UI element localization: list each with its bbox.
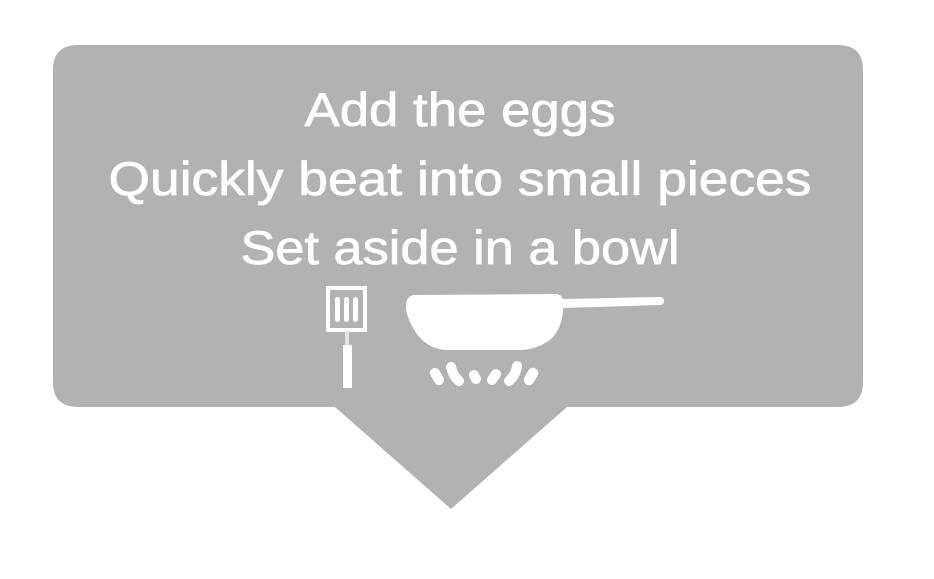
icon: frying pan [406, 294, 664, 350]
heading: add the eggs: Add the eggs [304, 83, 616, 136]
text: quickly beat into small pieces: Quickly beat into small pieces [108, 152, 812, 205]
icon: spatula [328, 288, 365, 388]
callout bubble [53, 45, 863, 509]
text: set aside in a bowl: Set aside in a bowl [240, 221, 680, 274]
icon: burner flames [435, 366, 533, 381]
